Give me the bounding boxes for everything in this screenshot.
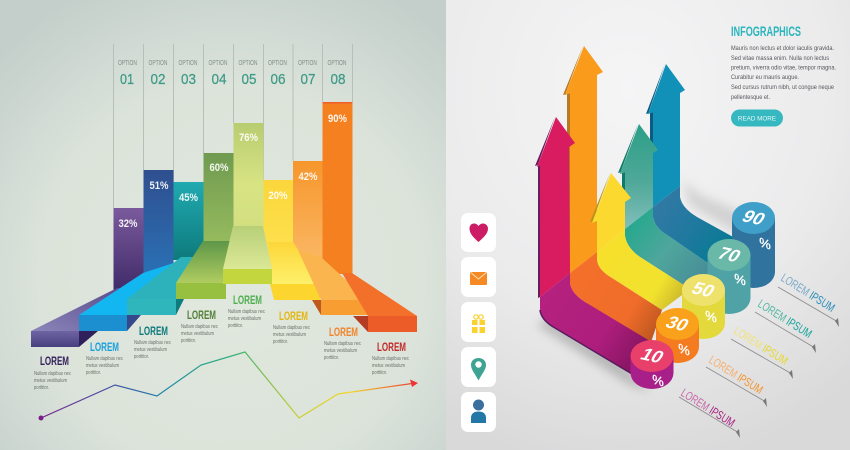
icon card: person (461, 392, 496, 432)
label: light green lorem (228, 293, 265, 329)
cylinder: 10 percent: % (652, 372, 664, 390)
option numbers: 07 (300, 72, 316, 88)
icon card: heart (461, 213, 496, 252)
band edge (540, 310, 632, 374)
label: orange lorem: metus vestibulum (324, 348, 357, 354)
label: red lorem: porttitor. (372, 370, 387, 376)
label: orange lorem: Nullam dapibus nec (324, 341, 361, 347)
platform: teal (127, 257, 208, 315)
vertical bars (114, 102, 352, 292)
text block: description (731, 45, 836, 101)
label: blue lorem (86, 340, 123, 376)
bar value labels: 76% (239, 132, 258, 144)
cylinder: 10 percent (630, 340, 674, 390)
label: teal lorem: metus vestibulum (134, 347, 167, 353)
label: blue lorem: Nullam dapibus nec (86, 356, 123, 362)
title: INFOGRAPHICS (731, 23, 801, 39)
label: orange lorem (324, 325, 361, 361)
option labels (118, 60, 346, 67)
shadow right of blue arrow (682, 180, 748, 232)
chart: option columns with 3D bars (31, 44, 417, 347)
cylinder: 70 percent: 70 (714, 243, 745, 266)
cylinder: 70 percent: % (734, 271, 746, 289)
cylinder: 50 percent: 50 (688, 278, 719, 301)
label: light green lorem: porttitor. (228, 323, 243, 329)
option numbers: 03 (181, 72, 196, 88)
platform: light orange (298, 250, 368, 315)
option labels: OPTION (328, 60, 346, 67)
label: yellow lorem: LOREM (279, 309, 308, 323)
label: teal lorem (134, 324, 171, 360)
arrow: yellow (590, 173, 631, 252)
bar value labels: 45% (179, 192, 198, 204)
option labels: OPTION (298, 60, 317, 67)
bar value labels: 20% (268, 190, 288, 202)
label: purple lorem: Nullam dapibus nec (34, 371, 71, 377)
label: light green lorem: metus vestibulum (228, 316, 261, 322)
label: light green lorem: Nullam dapibus nec (228, 309, 265, 315)
label: blue lorem: porttitor. (86, 370, 101, 376)
button: read more: READ MORE (738, 116, 776, 122)
label: light green lorem: LOREM (233, 293, 262, 307)
label: yellow lorem: Nullam dapibus nec (273, 325, 310, 331)
label: lorem ipsum 30: LOREM IPSUM (706, 353, 766, 397)
label: green lorem: porttitor. (181, 338, 196, 344)
text block: description: Sed vitae massa enim. Nulla non lectus (731, 55, 829, 62)
bar value labels: 32% (118, 218, 138, 230)
labels: lorem headings and captions (34, 293, 409, 391)
label: yellow lorem: metus vestibulum (273, 332, 306, 338)
cylinder: 50 percent (682, 274, 725, 339)
platform: purple (31, 273, 143, 347)
icon card: gift (461, 302, 496, 342)
label: purple lorem (34, 354, 71, 391)
label: green lorem (181, 308, 218, 344)
panel: left 3D bar chart background (0, 0, 446, 450)
cylinder: 30 percent: % (678, 341, 690, 359)
icon card: location pin (461, 347, 496, 387)
arrow: magenta (535, 117, 575, 298)
arrow: orange (563, 46, 603, 275)
cylinder: 90 percent (732, 202, 775, 288)
arrow: blue (646, 64, 685, 209)
label: lorem ipsum 10: LOREM IPSUM (678, 386, 738, 430)
band: teal (625, 207, 715, 289)
label: teal lorem: porttitor. (134, 354, 149, 360)
label: purple lorem: LOREM (40, 354, 69, 368)
option numbers: 06 (270, 72, 286, 88)
band: magenta (540, 273, 650, 374)
label: red lorem: Nullam dapibus nec (372, 356, 409, 362)
cylinder: 30 percent (656, 308, 699, 363)
label: red lorem: LOREM (377, 340, 406, 354)
option numbers: 04 (212, 72, 226, 88)
band: blue (653, 186, 735, 268)
text block: description: Mauris non lectus et dolor iaculis gravida. (731, 45, 834, 52)
bar value labels (118, 113, 347, 230)
label: purple lorem: porttitor. (34, 385, 49, 391)
label: blue lorem: metus vestibulum (86, 363, 119, 369)
option labels: OPTION (178, 60, 198, 67)
label: lorem ipsum 50: LOREM IPSUM (731, 324, 791, 368)
option numbers: 08 (330, 72, 346, 88)
text block: description: pretium, viverra odio vitae, tempor magna. (731, 64, 836, 72)
label: purple lorem: metus vestibulum (34, 378, 67, 384)
arrows: isometric rising arrows (535, 46, 735, 374)
cylinder: 30 percent: 30 (662, 312, 693, 335)
panel: right isometric arrows background (446, 0, 850, 450)
label: red lorem: metus vestibulum (372, 363, 405, 369)
bar value labels: 42% (298, 171, 318, 183)
cylinder: 50 percent: % (705, 308, 717, 326)
platform: red orange (342, 273, 417, 332)
option labels: OPTION (118, 60, 137, 67)
cylinder: 90 percent: % (759, 235, 771, 253)
bar value labels: 90% (328, 113, 347, 125)
option labels: OPTION (208, 60, 228, 67)
label: green lorem: LOREM (187, 308, 216, 322)
label: blue lorem: LOREM (90, 340, 119, 354)
arrow: teal (618, 124, 658, 229)
label: teal lorem: LOREM (139, 324, 168, 338)
option numbers: 02 (150, 72, 166, 88)
bar value labels: 51% (150, 180, 169, 192)
option numbers (120, 72, 346, 88)
platform: yellow (267, 242, 320, 300)
icon card: envelope (461, 257, 496, 297)
band: yellow (597, 229, 690, 310)
option numbers: 05 (242, 72, 256, 88)
text block: description: Curabitur eu mauris augue. (731, 74, 799, 81)
bar value labels: 60% (210, 162, 229, 174)
line chart with arrow (38, 352, 418, 420)
platform: green (176, 241, 230, 299)
option labels: OPTION (268, 60, 287, 67)
platform: blue (79, 257, 192, 331)
label: lorem ipsum 90: LOREM IPSUM (778, 271, 838, 315)
option numbers: 01 (120, 72, 134, 88)
cylinder: 70 percent (708, 239, 750, 314)
shadow below arrows (537, 318, 650, 392)
label: red lorem (372, 340, 409, 376)
text block: description: Sed cursus rutrum nibh, ut congue neque (731, 84, 834, 91)
platform: light green (223, 226, 272, 284)
label: orange lorem: porttitor. (324, 355, 339, 361)
band: orange (570, 252, 662, 345)
label: lorem ipsum 70: LOREM IPSUM (755, 297, 815, 341)
label: yellow lorem: porttitor. (273, 339, 288, 345)
label: teal lorem: Nullam dapibus nec (134, 340, 171, 346)
label: orange lorem: LOREM (329, 325, 358, 339)
label: yellow lorem (273, 309, 310, 345)
cylinder: 10 percent: 10 (637, 344, 668, 367)
isometric labels (678, 271, 839, 438)
option labels: OPTION (148, 60, 168, 67)
option labels: OPTION (238, 60, 258, 67)
text block: description: pellentesque et. (731, 94, 770, 101)
label: green lorem: Nullam dapibus nec (181, 324, 218, 330)
cylinder: 90 percent: 90 (738, 206, 770, 229)
button: read more (731, 110, 783, 126)
label: green lorem: metus vestibulum (181, 331, 214, 337)
